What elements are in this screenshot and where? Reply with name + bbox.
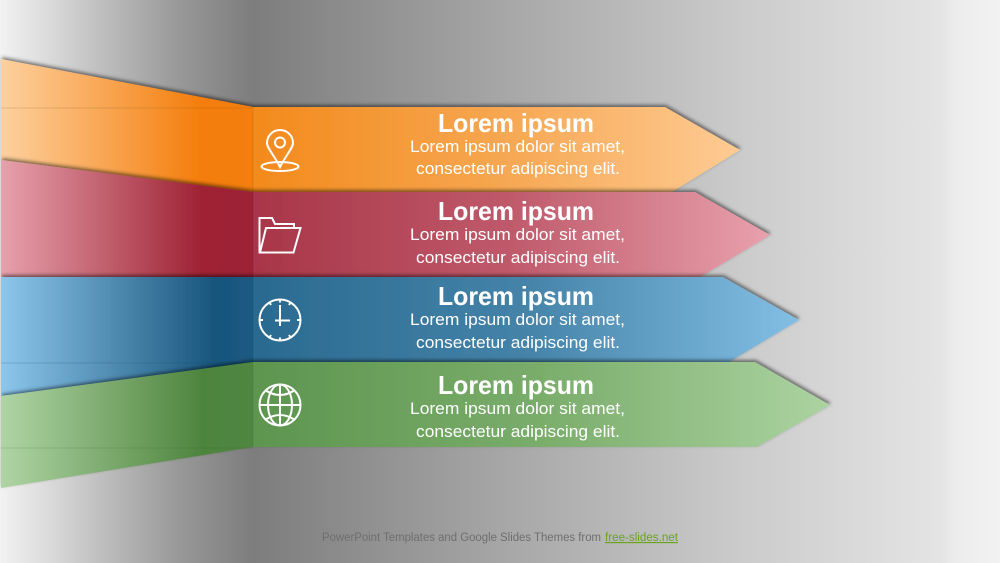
text: orange [410, 108, 625, 178]
text: orange: Lorem ipsum dolor sit amet, [410, 137, 625, 156]
text: red: consectetur adipiscing elit. [416, 248, 620, 267]
panel: green arrow [1, 362, 830, 488]
text: blue: Lorem ipsum dolor sit amet, [410, 310, 625, 329]
text: blue [410, 281, 625, 352]
text: red: Lorem ipsum [438, 196, 594, 226]
text: green: consectetur adipiscing elit. [416, 422, 620, 441]
icon: globe [260, 384, 300, 426]
text: red: Lorem ipsum dolor sit amet, [410, 225, 625, 244]
text: orange: Lorem ipsum [438, 108, 594, 138]
panel: red arrow [1, 160, 770, 277]
icon: folder [260, 218, 300, 252]
text: green: Lorem ipsum dolor sit amet, [410, 399, 625, 418]
text: red [410, 196, 625, 267]
footer credit: PowerPoint Templates and Google Slides Themes from [322, 532, 601, 544]
panel: orange arrow [1, 59, 740, 192]
text: blue: Lorem ipsum [438, 281, 594, 311]
panel: blue arrow [1, 277, 799, 396]
text: green [410, 370, 625, 441]
footer credit: free-slides.net [605, 532, 679, 544]
icon: clock [260, 299, 300, 341]
text: blue: consectetur adipiscing elit. [416, 333, 620, 352]
text: orange: consectetur adipiscing elit. [416, 159, 620, 178]
icon: map pin [262, 130, 298, 171]
text: green: Lorem ipsum [438, 370, 594, 400]
